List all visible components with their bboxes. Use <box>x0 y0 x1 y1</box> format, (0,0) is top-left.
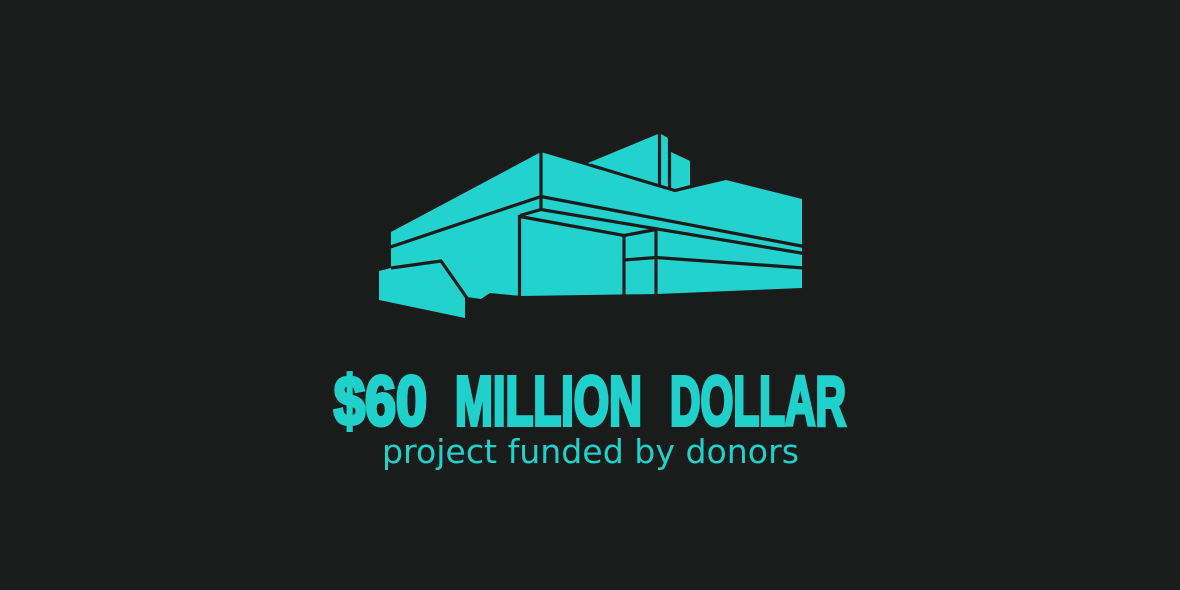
main building body <box>391 152 802 299</box>
headline: dollar: DOLLAR <box>670 362 846 440</box>
front left wing <box>379 262 465 318</box>
building outlines <box>389 130 804 298</box>
headline: million: MILLION <box>455 362 642 440</box>
icon: building <box>379 130 804 318</box>
headline: amount: $60 <box>334 362 427 440</box>
headline <box>334 362 846 440</box>
rear roof volume <box>588 134 690 192</box>
subtitle: project funded by donors <box>382 432 799 471</box>
